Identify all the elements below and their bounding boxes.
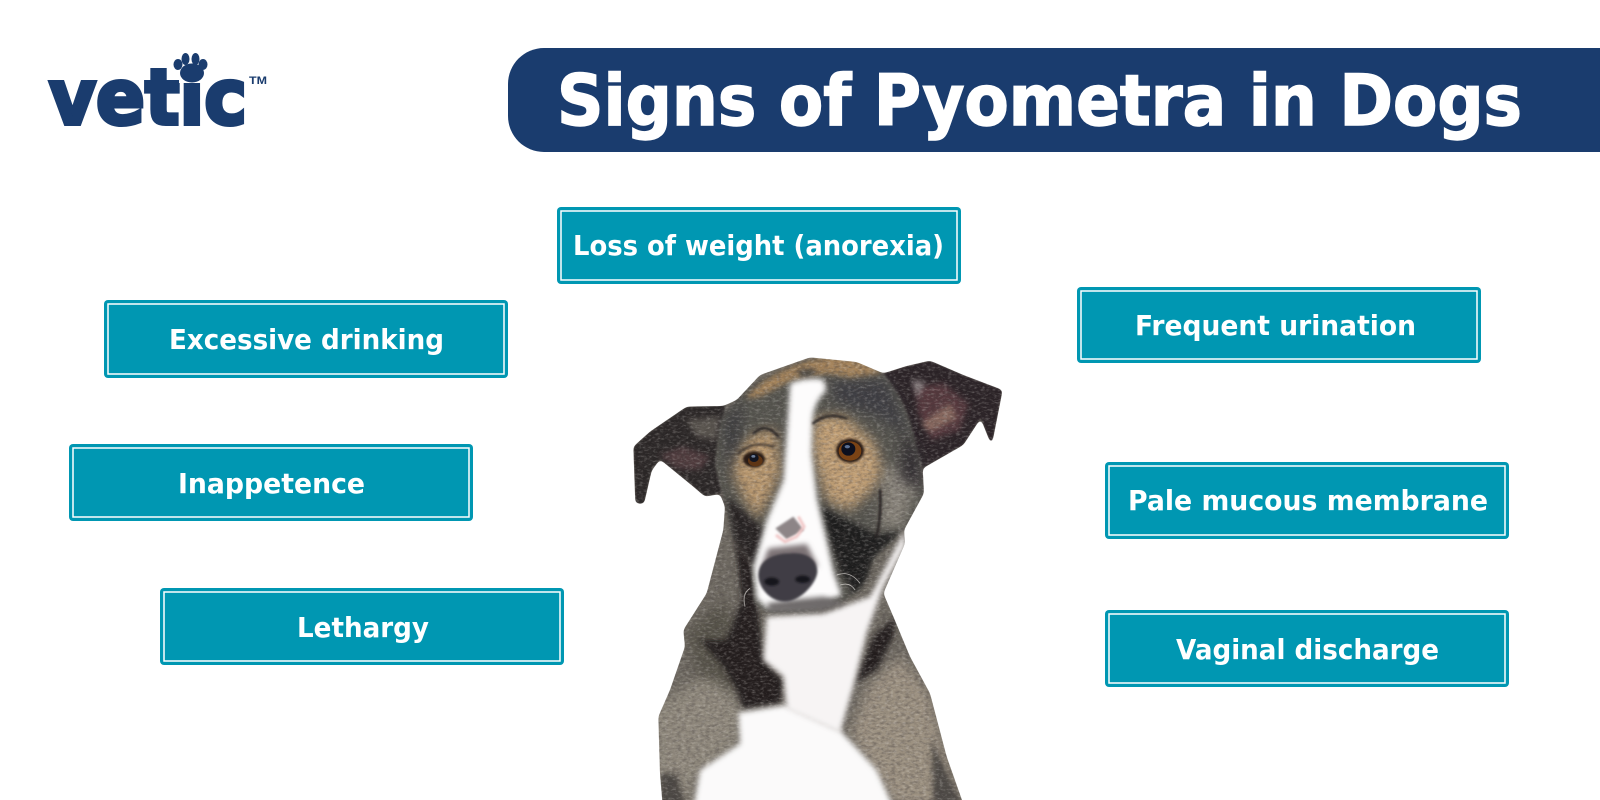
logo wordmark: vetic <box>49 54 247 143</box>
sign: Loss of weight <box>557 207 961 284</box>
title banner <box>508 48 1600 152</box>
sign: Pale mucous membrane: Pale mucous membrane <box>1128 484 1488 517</box>
dog fur texture <box>634 358 1002 800</box>
dog left ear <box>633 405 725 504</box>
logo: vetic <box>49 44 267 143</box>
title: Signs of Pyometra in Dogs <box>557 60 1522 142</box>
sign: Pale mucous membrane <box>1105 462 1509 539</box>
dog nose <box>758 553 817 602</box>
sign: Excessive drinking: Excessive drinking <box>169 323 444 356</box>
sign: Lethargy: Lethargy <box>297 611 429 644</box>
sign: Loss of weight: Loss of weight (anorexia) <box>573 229 944 262</box>
icon: paw print <box>174 53 208 82</box>
sign: Frequent urination <box>1077 287 1481 363</box>
dog body <box>634 358 1002 800</box>
logo dot cover <box>179 44 205 83</box>
dog whiskers <box>744 574 860 607</box>
dog wrinkles and cheek lines <box>738 416 880 537</box>
dog head <box>715 354 924 613</box>
dog white blaze and muzzle <box>693 379 905 800</box>
sign: Excessive drinking <box>104 300 508 378</box>
illustration: dog portrait <box>633 358 1002 800</box>
sign: Vaginal discharge: Vaginal discharge <box>1176 633 1439 666</box>
sign: Inappetence <box>69 444 473 521</box>
sign: Vaginal discharge <box>1105 610 1509 687</box>
dog dark chest patches <box>700 540 895 708</box>
trademark mark: TM <box>249 75 267 87</box>
dog right ear <box>883 361 1003 468</box>
dog left eye <box>743 451 765 467</box>
sign: Inappetence: Inappetence <box>178 467 365 500</box>
dog right eye <box>836 439 864 463</box>
sign: Frequent urination: Frequent urination <box>1135 309 1416 342</box>
sign: Lethargy <box>160 588 564 665</box>
